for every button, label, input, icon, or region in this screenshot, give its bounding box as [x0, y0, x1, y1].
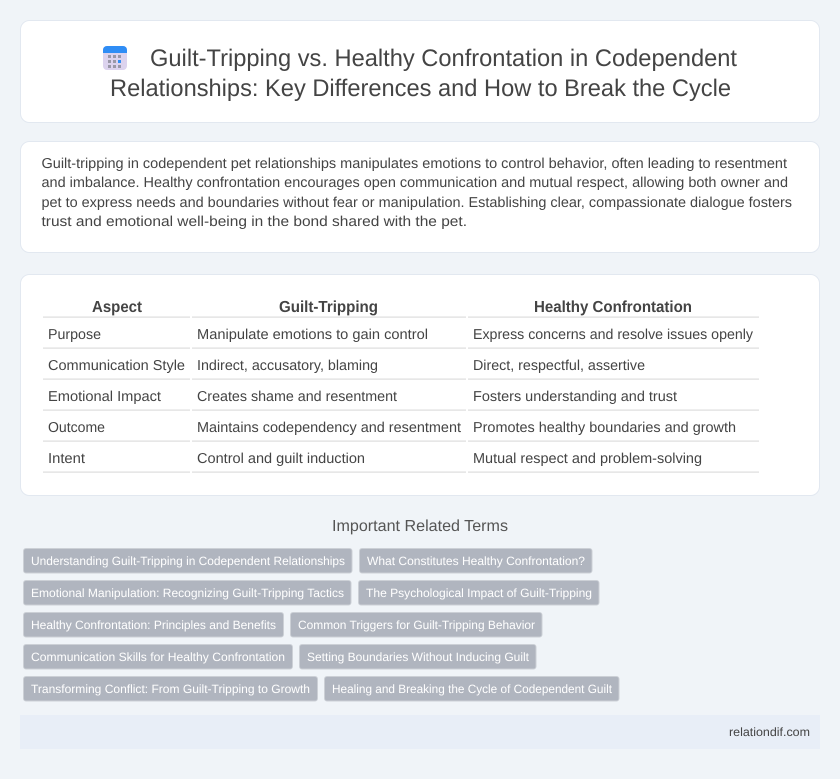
- intro text block: trust and emotional well-being in the bond shared with the pet.: [42, 214, 467, 230]
- table header row: Guilt-Tripping: [279, 299, 378, 316]
- title: Guilt-Tripping vs. Healthy Confrontation in Codependent: [150, 45, 737, 72]
- icon: calendar: [103, 46, 127, 70]
- tag: The Psychological Impact of Guilt-Tripping: [366, 586, 592, 600]
- table row: intent: Mutual respect and problem-solving: [473, 451, 702, 467]
- table header row: [43, 299, 759, 318]
- intro text block: [42, 156, 792, 230]
- tag: [24, 580, 351, 605]
- footer bar: [20, 715, 820, 749]
- intro text block: pet to express needs and boundaries without fear or manipulation. Establishing clear, compassionate dialogue fosters: [42, 195, 792, 211]
- table row: communication style: Indirect, accusatory, blaming: [197, 358, 378, 374]
- tag: Communication Skills for Healthy Confrontation: [31, 650, 285, 664]
- footer site name: relationdif.com: [729, 725, 810, 739]
- tag: [24, 644, 292, 669]
- table row: outcome: Outcome: [48, 420, 105, 436]
- tag: Common Triggers for Guilt-Tripping Behavior: [298, 618, 535, 632]
- tag: [324, 676, 619, 701]
- tag: Emotional Manipulation: Recognizing Guilt-Tripping Tactics: [31, 586, 344, 600]
- panel: introduction: [20, 142, 820, 252]
- table row: intent: Control and guilt induction: [197, 451, 365, 467]
- table header row: Healthy Confrontation: [534, 299, 692, 316]
- tag: Healthy Confrontation: Principles and Benefits: [31, 618, 276, 632]
- heading: important related terms: Important Related Terms: [332, 518, 508, 535]
- title: [110, 45, 737, 102]
- table row: outcome: Maintains codependency and resentment: [197, 420, 461, 436]
- table row: purpose: Express concerns and resolve issues openly: [473, 327, 754, 343]
- tag: [358, 580, 599, 605]
- table row: purpose: Purpose: [48, 327, 101, 343]
- intro text block: and imbalance. Healthy confrontation encourages open communication and mutual respect, allowing both owner and: [42, 175, 788, 191]
- table header row: Aspect: [92, 299, 143, 316]
- table row: communication style: Direct, respectful, assertive: [473, 358, 645, 374]
- table row: communication style: Communication Style: [48, 358, 185, 374]
- tag: What Constitutes Healthy Confrontation?: [367, 554, 585, 568]
- tag: Understanding Guilt-Tripping in Codependent Relationships: [31, 554, 345, 568]
- table row: outcome: [43, 420, 759, 442]
- tag: [300, 644, 536, 669]
- table row: emotional impact: Emotional Impact: [48, 389, 161, 405]
- tag: [24, 548, 352, 573]
- tag: [24, 612, 284, 637]
- table row: intent: Intent: [48, 451, 85, 467]
- table row: emotional impact: Fosters understanding and trust: [473, 389, 677, 405]
- related terms tags: [24, 548, 619, 701]
- tag: [290, 612, 542, 637]
- tag: [24, 676, 318, 701]
- table row: emotional impact: [43, 389, 759, 411]
- table row: communication style: [43, 358, 759, 380]
- tag: Transforming Conflict: From Guilt-Tripping to Growth: [31, 682, 310, 696]
- tag: [360, 548, 592, 573]
- title: Relationships: Key Differences and How to Break the Cycle: [110, 75, 731, 102]
- tag: Healing and Breaking the Cycle of Codependent Guilt: [332, 682, 613, 696]
- table row: purpose: [43, 327, 759, 349]
- panel: comparison table: [20, 274, 820, 496]
- tag: Setting Boundaries Without Inducing Guilt: [307, 650, 530, 664]
- intro text block: Guilt-tripping in codependent pet relationships manipulates emotions to control behavior, often leading to resentment: [42, 156, 787, 172]
- table row: outcome: Promotes healthy boundaries and growth: [473, 420, 736, 436]
- panel: title header: [20, 20, 820, 122]
- table row: intent: [43, 451, 759, 473]
- table row: purpose: Manipulate emotions to gain control: [197, 327, 428, 343]
- table row: emotional impact: Creates shame and resentment: [197, 389, 397, 405]
